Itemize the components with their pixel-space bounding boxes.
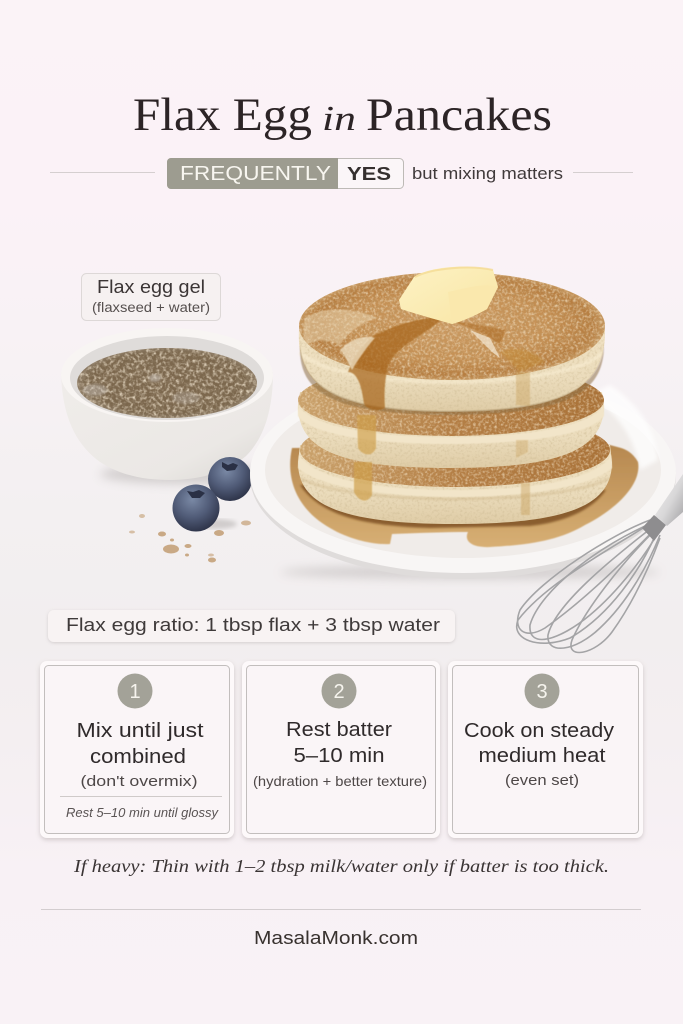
panel: step 3: Cook on steady: [464, 720, 614, 742]
panel: step 2: Rest batter: [286, 719, 392, 741]
panel: step 1: combined: [90, 746, 186, 768]
verdict pill: FREQUENTLY: [180, 163, 331, 185]
illustration: plate: [250, 373, 676, 579]
bottom pancake: [298, 413, 612, 524]
ratio banner: Flax egg ratio: 1 tbsp flax + 3 tbsp water: [66, 614, 440, 635]
verdict pill: YES: [347, 164, 391, 184]
subtitle text: but mixing matters: [412, 165, 563, 183]
label: flax egg gel: [82, 274, 220, 320]
syrup drips: [304, 309, 545, 515]
title: Flax Egg: [133, 89, 312, 141]
label: flax egg gel: (flaxseed + water): [92, 300, 210, 315]
syrup pool: [290, 445, 638, 547]
panel: step 1: Mix until just: [76, 720, 204, 742]
illustration: bowl of flax gel: [61, 328, 273, 484]
panel: step 3: medium heat: [478, 745, 606, 767]
step number 2: [322, 674, 356, 708]
footer brand: MasalaMonk.com: [254, 928, 418, 948]
middle pancake: [298, 364, 604, 468]
butter pat: [399, 267, 498, 324]
panel: step 3: [448, 661, 643, 838]
panel: step 3: (even set): [505, 772, 579, 789]
title: in: [322, 99, 356, 138]
tip note: If heavy: Thin with 1–2 tbsp milk/water only if batter is too thick.: [73, 856, 609, 876]
subtitle row: [50, 158, 633, 189]
verdict pill: [167, 158, 404, 189]
step number 1: 1: [129, 681, 141, 703]
flax crumbs: [129, 514, 251, 562]
illustration: whisk: [517, 474, 683, 652]
step number 3: [524, 674, 560, 708]
panel: step 1: [40, 661, 234, 838]
panel: step 1: Rest 5–10 min until glossy: [66, 805, 219, 820]
panel: step 2: 5–10 min: [294, 745, 384, 767]
pancake stack: [298, 272, 612, 524]
panel: step 2: (hydration + better texture): [253, 773, 427, 789]
title: Pancakes: [366, 89, 552, 141]
label: flax egg gel: Flax egg gel: [97, 277, 205, 297]
ratio banner: [48, 610, 455, 642]
title: [133, 89, 552, 141]
top pancake: [299, 272, 605, 415]
illustration: blueberries: [172, 457, 252, 532]
panel: step 1: (don't overmix): [80, 773, 198, 790]
step number 2: 2: [333, 681, 345, 703]
step number 1: [118, 674, 152, 708]
flax gel: [77, 348, 257, 418]
step number 3: 3: [536, 681, 548, 703]
panel: step 2: [242, 661, 440, 838]
